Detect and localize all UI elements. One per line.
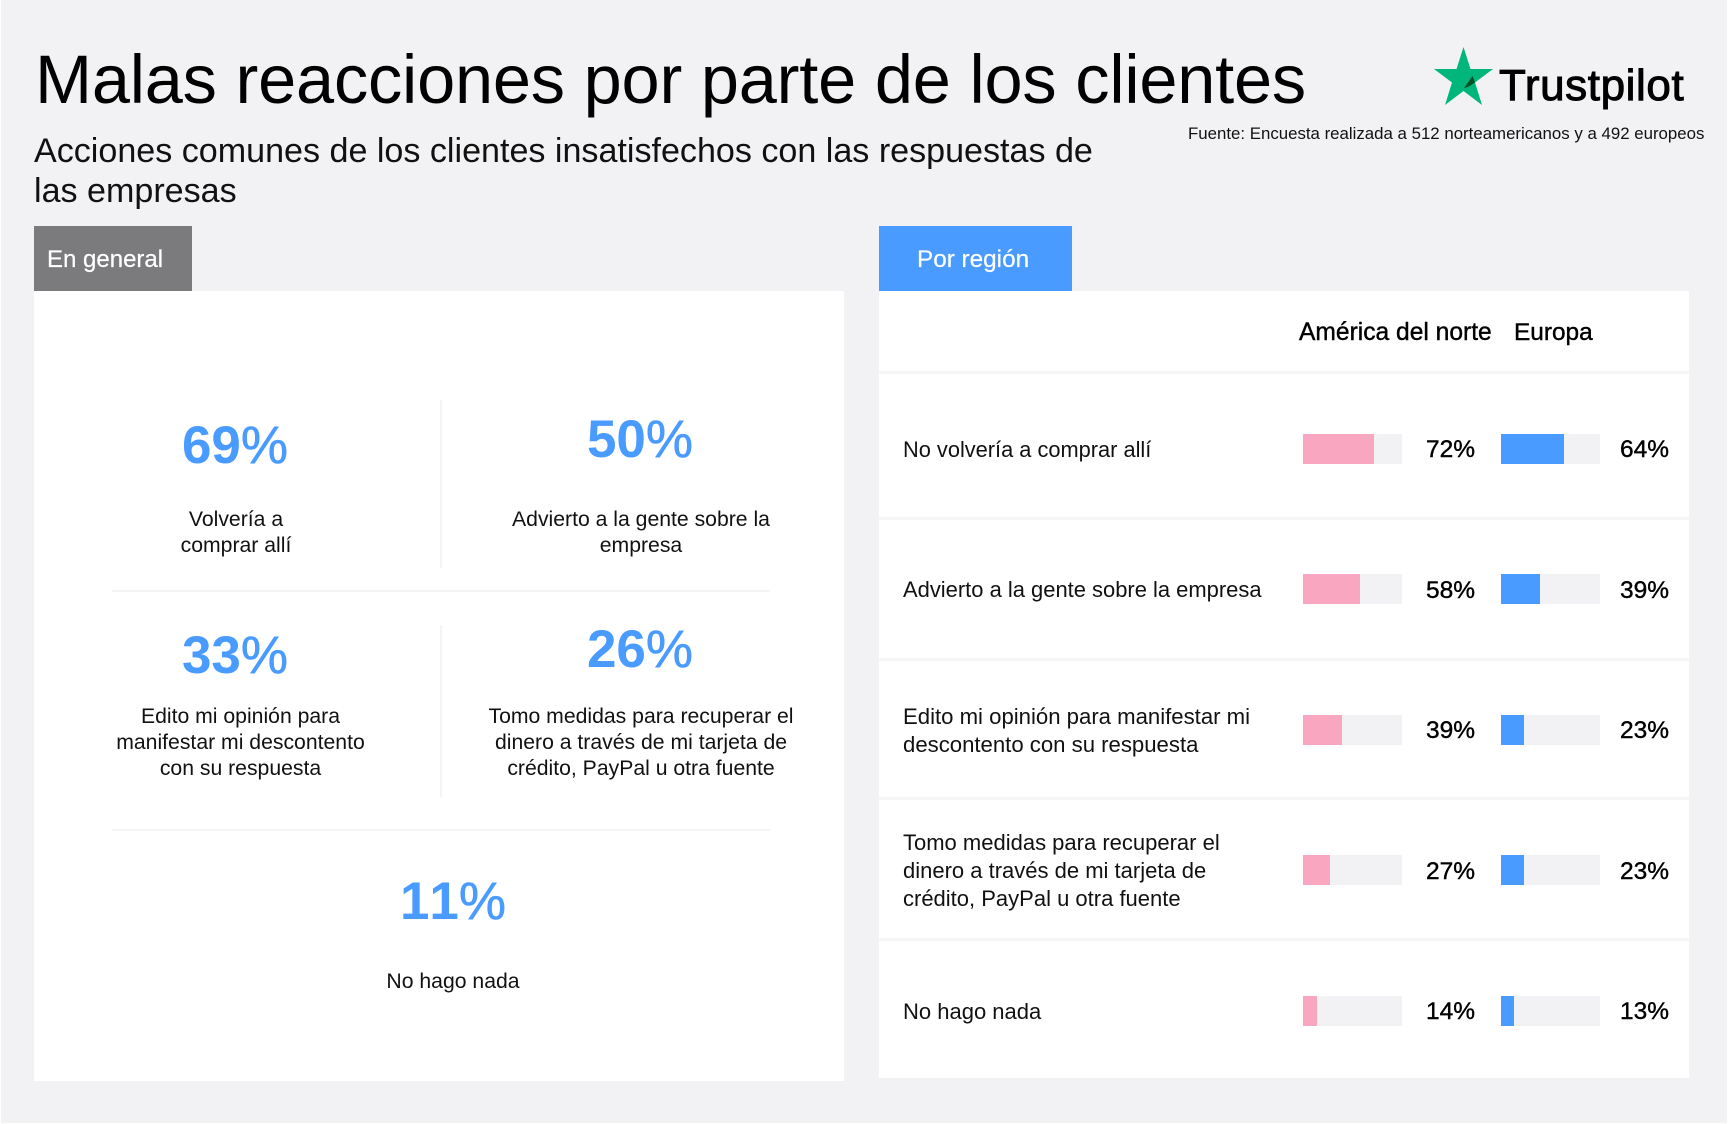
tab: En general — [34, 226, 192, 292]
column header: Europa: Europa — [1514, 319, 1593, 346]
label: edito: con su respuesta — [160, 757, 321, 780]
label: volvería — [181, 508, 292, 556]
value 64%: 64% — [1620, 436, 1669, 463]
label: tomo: crédito, PayPal u otra fuente — [507, 757, 775, 780]
row label 3 — [903, 704, 1250, 756]
tab: Por región — [879, 226, 1072, 292]
label: edito — [116, 705, 365, 780]
bar: América 14% — [1303, 996, 1402, 1026]
subtitle: Acciones comunes de los clientes insatisfechos con las respuestas de — [34, 132, 1093, 170]
bar: Europa 13% — [1501, 996, 1600, 1026]
row label 4 — [903, 830, 1220, 911]
stat: 26%: 26% — [587, 620, 693, 679]
subtitle: las empresas — [34, 172, 237, 210]
row label 5: No hago nada — [903, 998, 1041, 1024]
row label 4: crédito, PayPal u otra fuente — [903, 886, 1181, 911]
label: edito: Edito mi opinión para — [141, 705, 340, 728]
stat: 11%: 11% — [400, 872, 506, 931]
label: tomo: dinero a través de mi tarjeta de — [495, 731, 787, 754]
row label 2: Advierto a la gente sobre la empresa — [903, 577, 1262, 602]
label: tomo — [488, 705, 794, 780]
panel: por región — [879, 291, 1689, 1078]
stat: 33%: 33% — [182, 626, 288, 685]
value 58%: 58% — [1426, 577, 1475, 604]
bar: Europa 39% — [1501, 574, 1600, 604]
row label 4: dinero a través de mi tarjeta de — [903, 858, 1206, 883]
bar: Europa 64% — [1501, 434, 1600, 464]
label: tomo: Tomo medidas para recuperar el — [488, 705, 794, 728]
source note: Fuente: Encuesta realizada a 512 norteamericanos y a 492 europeos — [1188, 124, 1704, 143]
value 23%: 23% — [1620, 858, 1669, 885]
logo: Trustpilot: Trustpilot — [1499, 61, 1684, 110]
title: Malas reacciones por parte de los clientes — [35, 41, 1306, 118]
bar: América 27% — [1303, 855, 1402, 885]
tab: Por región: Por región — [917, 246, 1029, 273]
subtitle — [34, 132, 1093, 210]
bar: Europa 23% — [1501, 715, 1600, 745]
value 13%: 13% — [1620, 998, 1669, 1025]
stat: 69%: 69% — [182, 416, 288, 474]
value 39%: 39% — [1426, 717, 1475, 744]
value 39%: 39% — [1620, 577, 1669, 604]
label: volvería: comprar allí — [181, 534, 291, 556]
value 14%: 14% — [1426, 998, 1475, 1025]
label: edito: manifestar mi descontento — [116, 731, 365, 754]
value 23%: 23% — [1620, 717, 1669, 744]
stat: 50%: 50% — [587, 410, 693, 468]
logo: Trustpilot — [1434, 47, 1684, 110]
bar: Europa 23% — [1501, 855, 1600, 885]
row label 4: Tomo medidas para recuperar el — [903, 830, 1220, 855]
panel: en general — [34, 291, 844, 1081]
column header: América del norte: América del norte — [1299, 319, 1492, 346]
label: advierto — [512, 508, 770, 557]
label: volvería: Volvería a — [189, 508, 283, 530]
bar: América 58% — [1303, 574, 1402, 604]
value 27%: 27% — [1426, 858, 1475, 885]
row label 3: descontento con su respuesta — [903, 732, 1198, 756]
row label 1: No volvería a comprar allí — [903, 437, 1151, 462]
tab: En general: En general — [47, 246, 163, 273]
value 72%: 72% — [1426, 436, 1475, 463]
label: advierto: empresa — [600, 534, 682, 557]
label: no hago nada: No hago nada — [386, 970, 520, 993]
row label 3: Edito mi opinión para manifestar mi — [903, 704, 1250, 728]
bar: América 39% — [1303, 715, 1402, 745]
label: advierto: Advierto a la gente sobre la — [512, 508, 770, 531]
bar: América 72% — [1303, 434, 1402, 464]
